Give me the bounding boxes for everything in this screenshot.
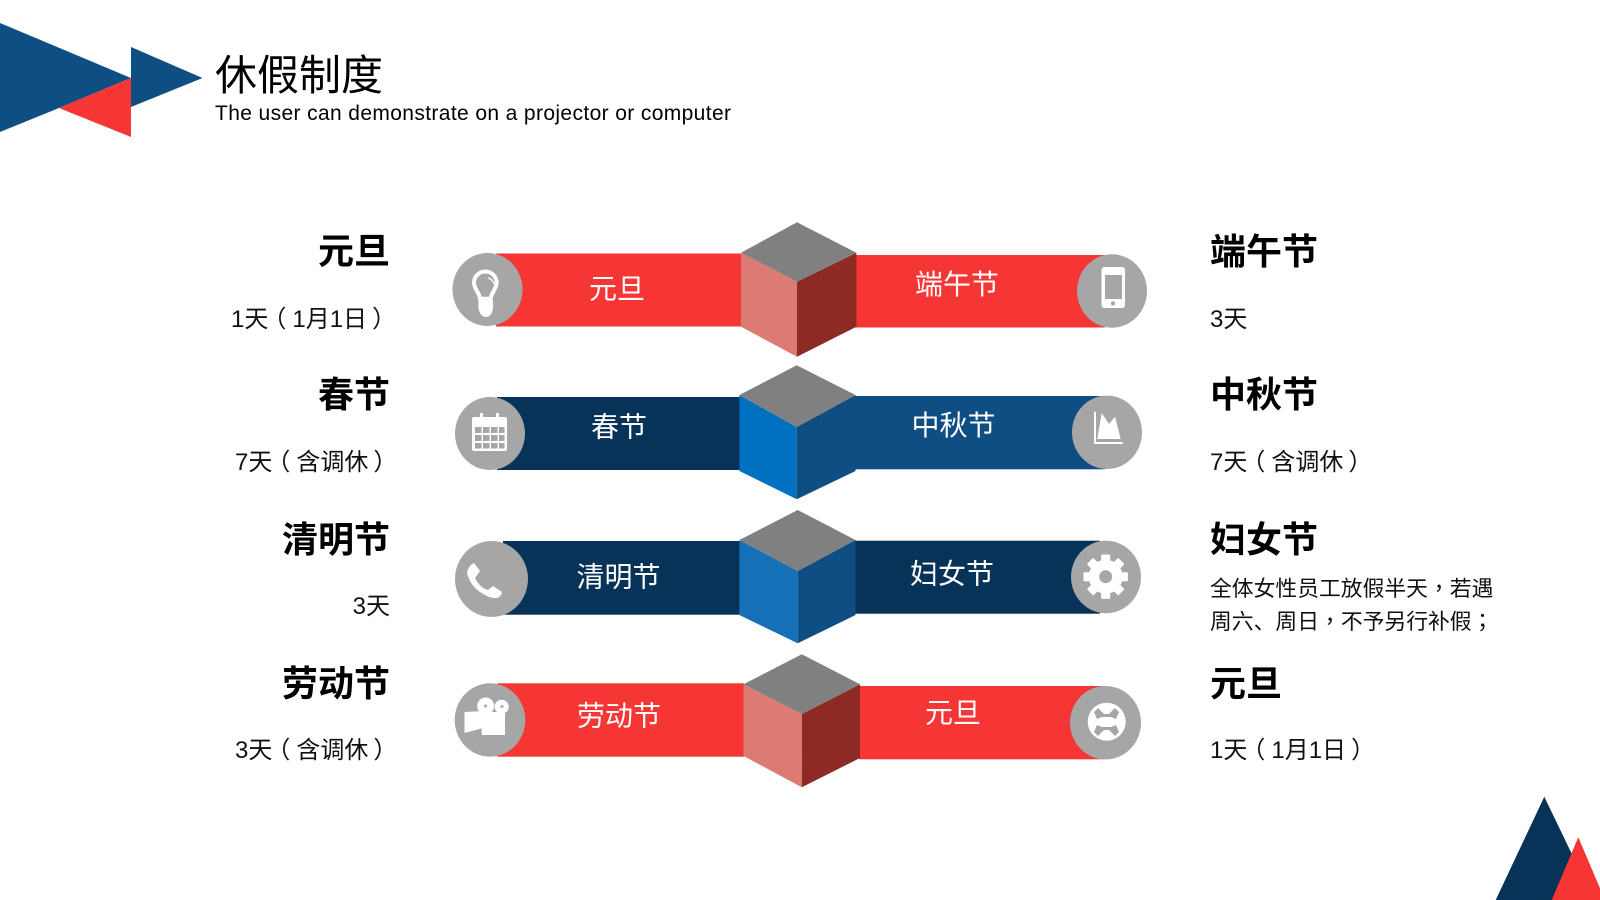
bar label: 中秋节: 中秋节 [911,410,996,441]
row 1: 元旦 and 端午节 [452,222,1147,357]
decorative triangles: top left [0,23,202,137]
bar: 元旦 [859,686,1103,759]
left text: 清明节 [282,519,390,620]
cube: red lower [744,654,860,787]
title: 休假制度 [215,52,383,99]
bar: 春节 [497,397,740,470]
left text: 清明节: 3天 [353,593,390,620]
left text: 劳动节: 劳动节 [282,663,390,704]
cube: red [741,222,856,357]
right text: 端午节: 端午节 [1210,231,1318,272]
left text: 元旦: 1天（1月1日） [231,306,396,333]
bar label: 清明节: 清明节 [576,562,661,592]
decorative triangles: bottom right [1496,797,1600,900]
bar: 中秋节 [854,396,1105,469]
icon: smartphone [1077,254,1147,328]
bar: 清明节 [503,541,740,615]
right text: 妇女节: 妇女节 [1210,519,1318,560]
row 2: 春节 and 中秋节 [455,365,1142,499]
left text: 春节: 7天（含调休） [235,449,397,476]
bar label: 劳动节: 劳动节 [577,700,661,732]
right text: 元旦: 元旦 [1210,663,1282,704]
bar label: 元旦: 元旦 [925,698,981,728]
icon: video camera [455,683,525,757]
bar: 端午节 [855,255,1105,328]
right text: 中秋节 [1210,374,1372,476]
cube: blue [739,365,856,499]
bar: 劳动节 [497,683,744,757]
right text: 妇女节 [1210,519,1493,636]
right text: 妇女节: 周六、周日，不予另行补假； [1210,605,1493,636]
left text: 元旦 [231,230,396,333]
subtitle: The user can demonstrate on a projector or computer [215,102,731,125]
icon: area chart [1072,396,1142,469]
row 4: 劳动节 and 元旦 [455,654,1141,787]
right text: 元旦: 1天（1月1日） [1210,737,1375,764]
bar label: 元旦: 元旦 [589,274,645,304]
left text: 春节: 春节 [318,374,390,415]
right text: 端午节 [1210,231,1318,333]
icon: telephone [455,541,528,617]
left text: 劳动节: 3天（含调休） [235,737,397,764]
bar label: 妇女节: 妇女节 [910,558,994,590]
icon: football [1070,686,1141,759]
left text: 春节 [235,374,397,476]
icon: gear [1071,541,1141,613]
cube: mid blue [739,510,856,643]
right text: 端午节: 3天 [1210,306,1247,333]
bar: 元旦 [496,254,742,326]
icon: calendar [455,397,525,470]
right text: 中秋节: 中秋节 [1210,374,1318,415]
left text: 劳动节 [235,663,397,764]
row 3: 清明节 and 妇女节 [455,510,1141,643]
right text: 元旦 [1210,663,1375,764]
right text: 妇女节: 全体女性员工放假半天，若遇 [1210,572,1493,603]
right text: 中秋节: 7天（含调休） [1210,449,1372,476]
bar label: 端午节: 端午节 [915,269,999,300]
left text: 清明节: 清明节 [282,519,390,560]
bar: 妇女节 [854,541,1100,614]
icon: light bulb [452,253,522,326]
left text: 元旦: 元旦 [318,230,390,272]
bar label: 春节: 春节 [591,412,647,442]
